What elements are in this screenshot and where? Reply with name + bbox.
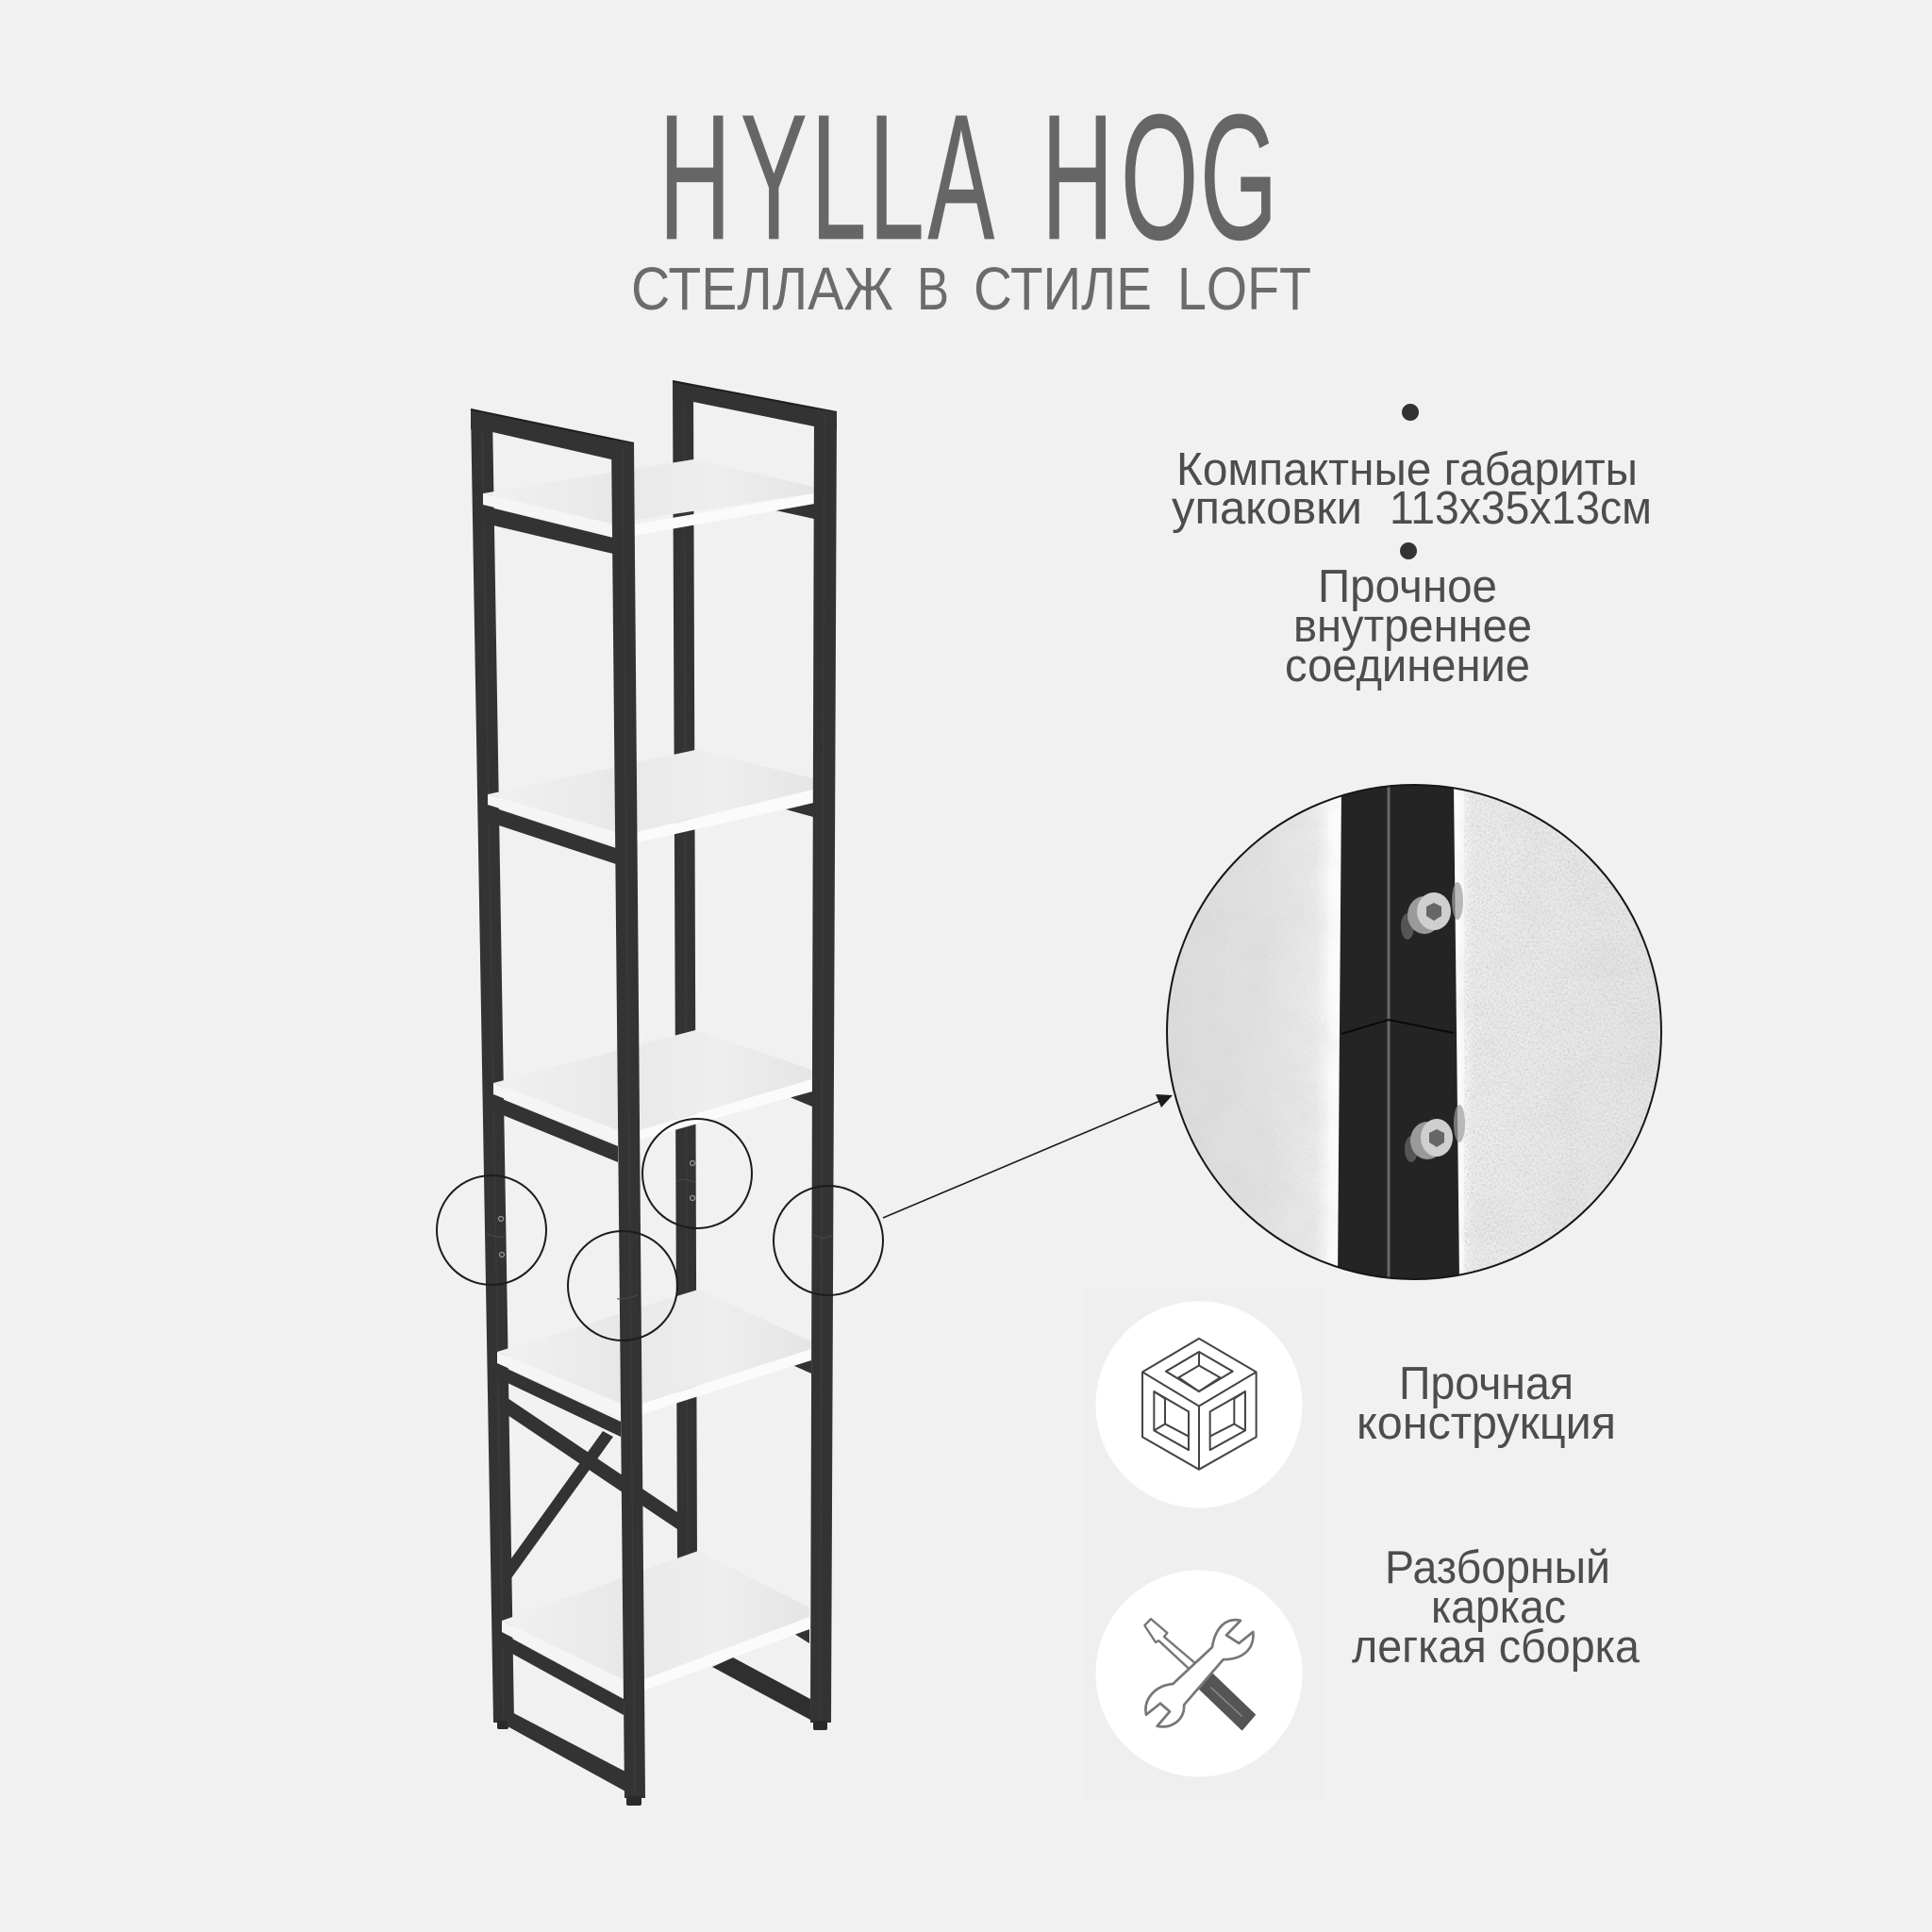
left post foot bbox=[497, 1721, 508, 1729]
detail marker circles bbox=[437, 1119, 883, 1341]
compact package text bbox=[1172, 444, 1652, 534]
subtitle: СТЕЛЛАЖ bbox=[631, 255, 893, 323]
subtitle bbox=[631, 255, 1311, 323]
sturdy construction text: конструкция bbox=[1357, 1398, 1616, 1449]
shelf 2 bbox=[488, 750, 813, 848]
right post foot bbox=[813, 1721, 827, 1730]
icon: wrench and screwdriver bbox=[1096, 1570, 1302, 1777]
disassemblable frame text bbox=[1352, 1542, 1641, 1673]
strong joint text bbox=[1285, 561, 1532, 691]
disassemblable frame text: легкая сборка bbox=[1352, 1622, 1641, 1673]
front side rails bbox=[479, 505, 625, 1791]
strong joint text: внутреннее bbox=[1293, 601, 1532, 652]
shelf 3 bbox=[493, 1030, 812, 1147]
title: HYLLA HOG bbox=[658, 78, 1277, 277]
compact package text: упаковки bbox=[1172, 483, 1362, 534]
subtitle: СТИЛЕ bbox=[974, 255, 1152, 323]
compact package text: 113x35x13см bbox=[1390, 483, 1652, 534]
feature: strong inner joint bbox=[1285, 542, 1532, 691]
screw bottom bbox=[1405, 1119, 1453, 1162]
strong joint text: Прочное bbox=[1318, 561, 1497, 612]
detail view outline bbox=[1167, 785, 1661, 1279]
joint screws bbox=[498, 1160, 694, 1257]
arrow to detail view bbox=[883, 1094, 1173, 1218]
shelf 5 bbox=[502, 1551, 809, 1700]
icon zone backdrop bbox=[1085, 1288, 1324, 1799]
joint seams bbox=[487, 1179, 832, 1299]
front top rail bbox=[471, 409, 634, 464]
middle post foot bbox=[626, 1796, 641, 1806]
metal bar bbox=[1338, 785, 1459, 1279]
disassemblable frame text: Разборный bbox=[1385, 1542, 1610, 1593]
feature: compact package bbox=[1172, 404, 1652, 534]
shelf 1 bbox=[483, 459, 814, 538]
subtitle: В bbox=[917, 255, 949, 323]
rear stubs under shelves bbox=[775, 504, 814, 1643]
strong joint text: соединение bbox=[1285, 641, 1530, 691]
disassemblable frame text: каркас bbox=[1431, 1582, 1566, 1633]
middle front post bbox=[611, 440, 645, 1798]
shelving unit illustration bbox=[471, 381, 837, 1806]
bullet bbox=[1400, 542, 1417, 559]
subtitle: LOFT bbox=[1177, 255, 1311, 323]
screw top bbox=[1401, 892, 1451, 940]
cross brace bbox=[508, 1398, 677, 1578]
compact package text: Компактные габариты bbox=[1176, 444, 1638, 495]
shelf 4 bbox=[497, 1290, 811, 1423]
back frame: rear post, top rail bbox=[673, 381, 837, 1566]
left post bbox=[471, 409, 514, 1723]
sturdy construction text bbox=[1357, 1358, 1616, 1449]
sturdy construction text: Прочная bbox=[1399, 1358, 1574, 1409]
rear bottom rail bbox=[712, 1657, 810, 1720]
detail view: bolted joint bbox=[1167, 785, 1661, 1279]
bullet bbox=[1402, 404, 1419, 421]
right post bbox=[810, 408, 837, 1723]
icon: cube bbox=[1096, 1302, 1302, 1507]
